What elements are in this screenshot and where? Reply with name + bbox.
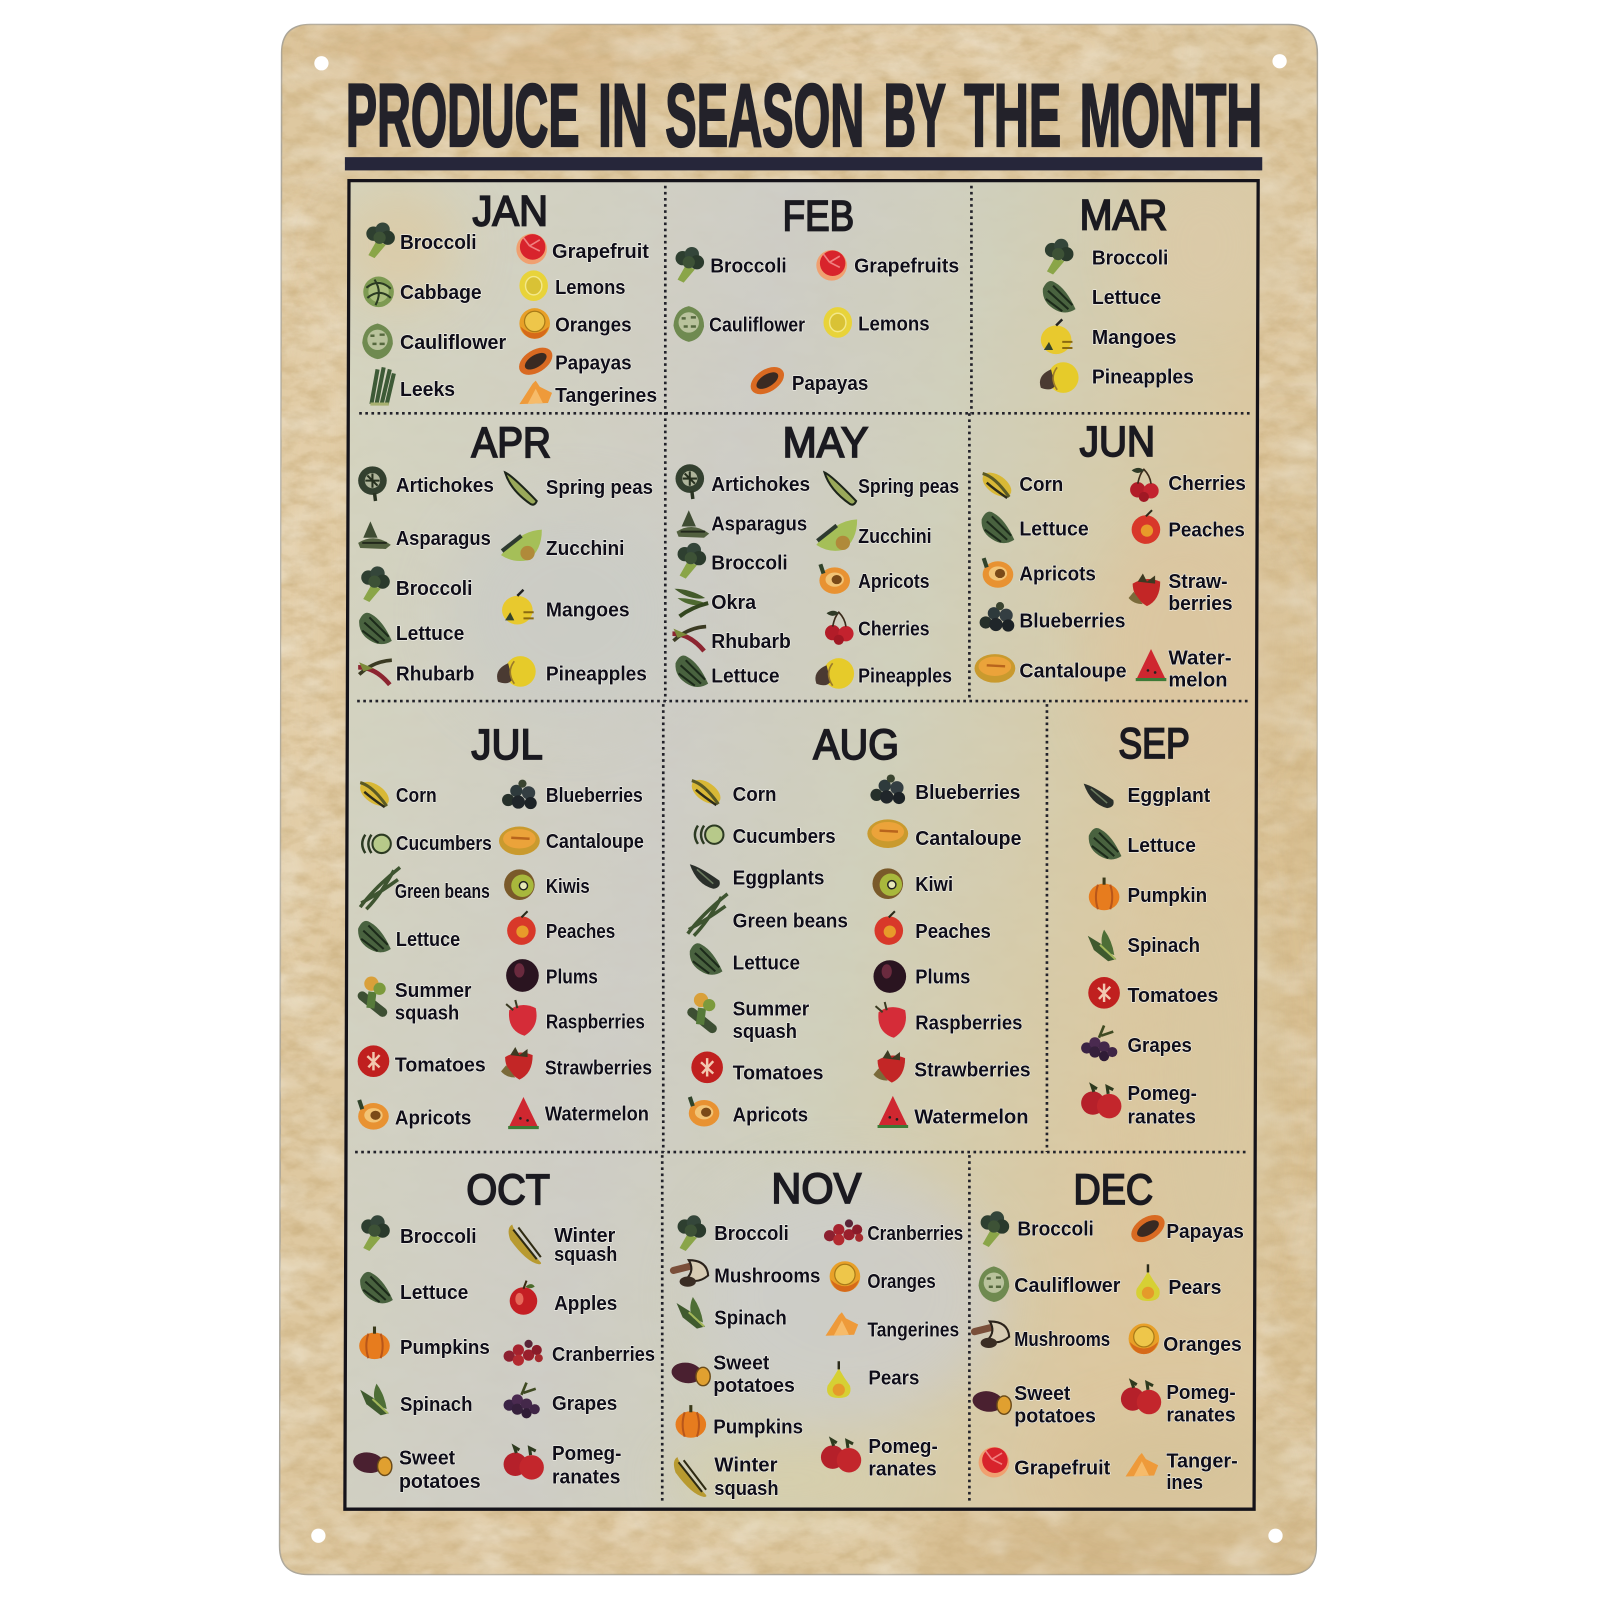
item: Spinach [677,1297,787,1329]
item: Cranberries: Cranberries [867,1223,963,1245]
item: Grapefruits: Grapefruits [854,255,959,277]
item: Lettuce [982,512,1089,543]
item: Winter squash: Winter [714,1454,778,1476]
item: Apricots: Apricots [1019,564,1096,586]
item: Lemons [823,307,930,338]
item: Artichokes [358,466,494,501]
item: Pineapples [815,658,952,689]
item: Lettuce [690,943,800,975]
item: Zucchini [816,519,932,551]
item: Cucumbers [362,833,492,855]
item: Pomegranates: Pomeg- [1128,1083,1197,1105]
item: Plums: Plums [915,967,970,989]
item: Tangerines [826,1312,959,1342]
item: Spring peas: Spring peas [546,477,653,499]
item: Papayas [514,342,632,380]
item: Cantaloupe [499,827,644,855]
item: Oranges: Oranges [555,315,632,337]
item: Eggplants [690,864,824,890]
item: Blueberries [870,774,1020,804]
item: Kiwis [504,869,590,900]
item: Mushrooms: Mushrooms [1014,1329,1110,1351]
item: Mangoes: Mangoes [1092,327,1177,349]
item: Artichokes: Artichokes [711,474,810,496]
item: Raspberries [876,1002,1022,1038]
item: Summer squash: Summer [395,980,471,1002]
item: Oranges: Oranges [1163,1334,1242,1356]
heading: FEB: FEB [783,193,854,241]
title underline bar [345,157,1262,170]
panel: OCT [352,1166,655,1493]
item: Green beans [360,867,490,909]
item: Cantaloupe [867,819,1021,850]
item: Broccoli: Broccoli [714,1223,789,1245]
item: Lettuce [359,613,464,645]
item: Cauliflower: Cauliflower [709,315,805,337]
item: Peaches: Peaches [915,921,991,943]
item: Kiwis: Kiwis [546,876,590,898]
item: Winter squash: Winter [554,1225,615,1247]
item: Corn [356,777,437,811]
item: Broccoli: Broccoli [711,552,788,574]
item: Grapes: Grapes [1128,1035,1192,1057]
item: Green beans: Green beans [733,911,848,933]
item: Lettuce: Lettuce [396,929,460,951]
item: Leeks: Leeks [400,379,455,401]
item: Pineapples: Pineapples [546,664,647,686]
item: Winter squash: squash [714,1478,779,1500]
item: Apples [510,1281,617,1315]
item: Rhubarb: Rhubarb [711,631,791,653]
item: Grapes [1081,1026,1192,1061]
item: Lettuce: Lettuce [400,1282,468,1304]
item: Tomatoes: Tomatoes [395,1054,486,1076]
item: Cauliflower [673,306,805,342]
item: Pomegranates: Pomeg- [1166,1382,1236,1404]
item: Grapes: Grapes [552,1393,617,1415]
item: Apricots [983,558,1096,588]
item: Lettuce: Lettuce [1128,835,1196,857]
item: Broccoli [361,1215,477,1251]
item: Watermelon: melon [1168,670,1228,692]
item: Lettuce: Lettuce [396,623,464,645]
item: Lemons: Lemons [858,314,930,336]
item: Mangoes [1041,319,1177,354]
item: Broccoli [361,566,472,602]
item: Broccoli [1045,239,1168,274]
item: Cherries: Cherries [858,619,930,641]
item: Pineapples [1040,362,1194,393]
item: Mangoes: Mangoes [546,599,630,621]
heading: OCT: OCT [466,1166,550,1214]
item: Asparagus: Asparagus [396,528,491,550]
item: Apples: Apples [554,1293,617,1315]
item: Corn: Corn [1019,474,1063,496]
item: Tomatoes [691,1052,823,1085]
item: Plums [506,959,598,992]
panel: APR [358,419,653,687]
panel: JAN [362,188,657,407]
item: Summer squash: Summer [733,998,809,1020]
item: Pomegranates [821,1436,938,1481]
item: Pomegranates [504,1443,621,1489]
item: Lettuce: Lettuce [711,666,780,688]
item: Watermelon [1136,647,1232,692]
item: Summer squash: squash [395,1002,459,1024]
item: Tomatoes [358,1045,486,1077]
item: Broccoli [676,247,787,283]
item: Pumpkins: Pumpkins [400,1337,490,1359]
item: Cauliflower: Cauliflower [1014,1275,1120,1297]
item: Pomegranates [1121,1382,1236,1426]
item: Sweet potatoes: Sweet [1014,1383,1071,1405]
panel: AUG [687,721,1031,1128]
item: Mushrooms [673,1260,820,1288]
item: Artichokes: Artichokes [396,475,494,497]
dotted grid dividers [355,186,1251,1502]
item: Asparagus [358,521,491,550]
item: Sweet potatoes: Sweet [713,1352,770,1374]
item: Pomegranates: ranates [552,1467,620,1489]
item: Winter squash [674,1454,779,1500]
item: Grapefruit [516,234,649,264]
item: Broccoli: Broccoli [710,255,787,277]
item: Cantaloupe: Cantaloupe [546,831,644,853]
item: Strawberries: Straw- [1168,571,1228,593]
item: Peaches [507,911,615,945]
item: Rhubarb: Rhubarb [396,664,474,686]
item: Cherries [1130,468,1246,502]
item: Spring peas: Spring peas [858,476,959,498]
item: Rhubarb [672,627,791,653]
item: Papayas [1126,1209,1244,1248]
item: Pears: Pears [868,1368,919,1390]
item: Cantaloupe: Cantaloupe [1019,661,1127,683]
item: Raspberries [506,1000,645,1036]
item: Lettuce: Lettuce [1019,519,1089,541]
table frame [345,181,1258,1509]
item: Blueberries: Blueberries [915,782,1020,804]
item: Tomatoes: Tomatoes [733,1063,823,1085]
item: Watermelon [508,1097,649,1128]
item: Pomegranates [1081,1083,1197,1128]
panel: MAR [1040,192,1194,393]
item: Broccoli [678,1215,789,1251]
item: Eggplant: Eggplant [1128,785,1210,807]
item: Pumpkin: Pumpkin [1128,885,1207,907]
item: Summer squash [362,977,471,1024]
item: Apricots: Apricots [733,1104,808,1126]
item: Cauliflower [979,1266,1120,1302]
item: Cucumbers [695,826,836,848]
item: Mushrooms [974,1321,1110,1351]
item: Cranberries: Cranberries [552,1344,655,1366]
item: Watermelon: Watermelon [914,1106,1029,1128]
title: THE [964,66,1061,165]
item: Lettuce [1043,281,1161,313]
item: Zucchini: Zucchini [546,538,624,560]
item: Lettuce [358,921,460,952]
item: Cabbage [363,277,482,307]
item: Strawberries [1129,571,1233,615]
item: Plums: Plums [546,967,598,989]
item: Oranges: Oranges [867,1271,936,1293]
item: Apricots: Apricots [395,1107,471,1129]
panel: SEP [1081,720,1218,1128]
metal sign background [276,20,1347,1582]
item: Apricots: Apricots [858,571,930,593]
item: Broccoli: Broccoli [396,578,472,600]
item: Leeks [370,367,455,404]
panel: MAY [672,419,959,689]
item: Broccoli [366,222,477,258]
item: Peaches: Peaches [546,921,615,943]
item: Oranges [830,1261,936,1293]
item: Sweet potatoes: potatoes [713,1375,795,1397]
item: Spinach: Spinach [400,1394,472,1416]
panel: JUL [356,721,652,1130]
item: Broccoli [981,1211,1094,1247]
item: Tangerines: Tangerines [555,385,657,407]
item: Broccoli: Broccoli [400,232,477,254]
item: Lettuce [1089,828,1196,859]
item: Tangerines: ines [1166,1472,1203,1494]
item: Grapefruit: Grapefruit [552,241,649,263]
item: Pineapples: Pineapples [858,666,952,688]
item: Sweet potatoes [352,1447,481,1493]
item: Asparagus [677,510,807,538]
item: Raspberries: Raspberries [915,1013,1022,1035]
title: BY [884,66,946,165]
corner mounting holes [311,54,1287,1543]
item: Tomatoes: Tomatoes [1128,985,1218,1007]
item: Cherries [825,611,930,645]
item: Pomegranates: ranates [1166,1404,1236,1426]
item: Rhubarb [358,660,474,686]
item: Watermelon: Watermelon [545,1103,649,1125]
item: Raspberries: Raspberries [546,1012,645,1034]
heading: SEP: SEP [1118,720,1190,768]
heading: NOV: NOV [771,1165,862,1213]
title: IN [598,66,648,165]
item: Corn: Corn [396,785,437,807]
item: Cauliflower: Cauliflower [400,332,506,354]
item: Strawberries: Strawberries [545,1057,652,1079]
item: Sweet potatoes: Sweet [399,1447,455,1469]
item: Eggplants: Eggplants [733,868,824,890]
panel: NOV [670,1165,963,1500]
item: Tangerines: Tanger- [1166,1450,1238,1472]
title: PRODUCE [346,66,580,165]
item: Peaches [1132,510,1245,544]
item: Papayas: Papayas [555,352,632,374]
item: Mangoes [502,590,630,624]
item: Cauliflower [362,323,506,359]
item: Corn [687,775,777,809]
item: Green beans [688,894,848,936]
item: Artichokes [676,464,810,499]
item: Okra: Okra [711,592,757,614]
item: Tomatoes [1088,977,1218,1009]
item: Papayas [746,361,868,400]
heading: MAR: MAR [1080,192,1167,240]
item: Plums [873,960,970,993]
item: Winter squash [509,1224,617,1266]
item: Strawberries: berries [1168,593,1233,615]
item: Sweet potatoes [670,1352,795,1397]
item: Grapefruits [816,250,959,281]
item: Pineapples [497,656,647,687]
item: Spinach: Spinach [1128,935,1200,957]
title [346,66,1262,165]
item: Cranberries [824,1219,963,1245]
item: Kiwi: Kiwi [915,874,953,896]
item: Lettuce: Lettuce [733,952,800,974]
item: Pineapples: Pineapples [1092,367,1194,389]
item: Pomegranates: ranates [1128,1106,1196,1128]
item: Cantaloupe: Cantaloupe [915,828,1021,850]
item: Cucumbers: Cucumbers [396,833,492,855]
item: Zucchini: Zucchini [858,526,932,548]
heading: AUG: AUG [813,721,899,769]
item: Blueberries: Blueberries [546,785,643,807]
item: Grapefruit [979,1447,1110,1479]
item: Lettuce: Lettuce [1092,287,1161,309]
item: Summer squash [692,993,809,1043]
item: Blueberries: Blueberries [1019,611,1126,633]
item: Strawberries [501,1047,652,1080]
item: Sweet potatoes [971,1383,1096,1427]
item: Lemons [519,270,626,301]
panel: JUN [974,418,1246,692]
item: Sweet potatoes: potatoes [1014,1405,1096,1427]
item: Papayas: Papayas [792,373,868,395]
item: Blueberries [980,602,1126,633]
item: Grapes [504,1383,617,1418]
item: Green beans: Green beans [395,881,490,903]
item: Winter squash: squash [554,1244,617,1266]
item: Eggplant [1084,784,1210,808]
item: Lettuce [675,656,780,688]
item: Pomegranates: Pomeg- [868,1436,938,1458]
heading: JUL: JUL [471,721,543,769]
item: Zucchini [501,530,624,561]
item: Strawberries: Strawberries [914,1060,1031,1082]
heading: JUN: JUN [1080,418,1155,466]
heading: APR: APR [471,419,551,467]
item: Broccoli: Broccoli [1092,247,1168,269]
heading: MAY: MAY [783,419,868,467]
item: Cranberries [504,1340,655,1366]
item: Broccoli [678,543,788,579]
item: Blueberries [502,780,643,809]
item: Sweet potatoes: potatoes [399,1471,481,1493]
item: Spring peas [824,472,959,505]
panel: FEB [673,193,959,400]
item: Papayas: Papayas [1166,1221,1244,1243]
item: Tangerines: Tangerines [867,1320,959,1342]
item: Broccoli: Broccoli [1017,1219,1094,1241]
item: Tangerines [519,381,657,407]
item: Pumpkins: Pumpkins [713,1417,803,1439]
item: Apricots [819,564,930,594]
item: Broccoli: Broccoli [400,1226,477,1248]
item: Kiwi [872,868,953,899]
item: Oranges [1129,1323,1242,1356]
item: Watermelon [878,1096,1029,1128]
item: Mushrooms: Mushrooms [714,1266,820,1288]
item: Pears: Pears [1168,1277,1221,1299]
item: Cantaloupe [974,654,1127,683]
title: SEASON [665,66,864,165]
item: Apricots [358,1100,471,1130]
item: Tangerines [1126,1450,1238,1494]
item: Corn [978,468,1063,502]
item: Cherries: Cherries [1168,473,1246,495]
item: Peaches: Peaches [1168,520,1245,542]
item: Asparagus: Asparagus [711,514,807,536]
heading: JAN: JAN [472,188,548,236]
item: Spinach [1088,930,1200,961]
item: Cabbage: Cabbage [400,282,482,304]
item: Watermelon: Water- [1168,647,1232,669]
item: Pumpkins [676,1405,803,1439]
item: Summer squash: squash [733,1021,797,1043]
item: Grapefruit: Grapefruit [1014,1457,1110,1479]
item: Corn: Corn [733,784,777,806]
item: Pomegranates: Pomeg- [552,1443,621,1465]
item: Strawberries [873,1050,1031,1083]
item: Peaches [874,911,991,945]
panel: DEC [971,1166,1244,1494]
title: MONTH [1080,66,1262,165]
item: Spring peas [505,472,653,505]
heading: DEC: DEC [1073,1166,1153,1214]
item: Pumpkin [1089,878,1207,910]
item: Lemons: Lemons [555,277,626,299]
item: Lettuce [360,1272,468,1304]
item: Apricots [689,1097,808,1127]
item: Cucumbers: Cucumbers [733,826,836,848]
item: Pomegranates: ranates [868,1459,937,1481]
item: Pears [827,1361,919,1398]
item: Oranges [519,308,632,339]
item: Pears [1136,1264,1221,1301]
item: Pumpkins [359,1327,490,1359]
item: Spinach: Spinach [714,1307,787,1329]
item: Spinach [360,1384,472,1416]
item: Okra [674,589,757,616]
